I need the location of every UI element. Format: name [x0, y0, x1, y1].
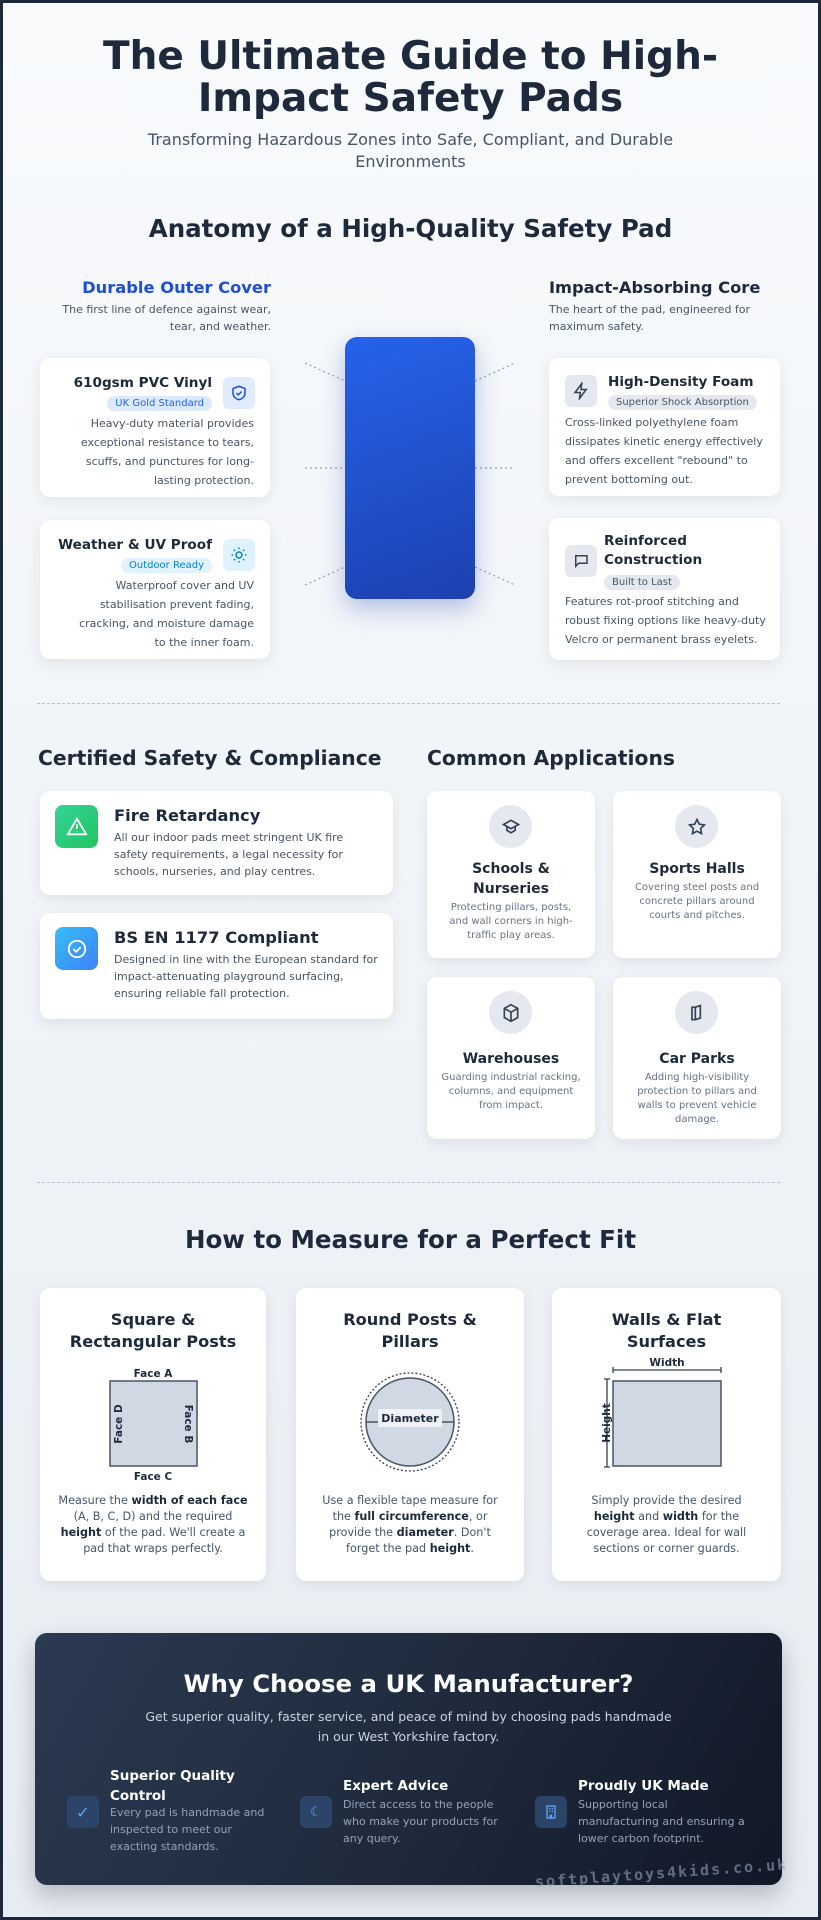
card: warehouses: Warehouses: [463, 1051, 559, 1067]
heading: certified safety: Certified Safety & Compliance: [38, 746, 382, 770]
card: fire retardancy: [40, 791, 393, 895]
card: BS EN 1177: [40, 913, 393, 1019]
card: reinforced construction: [549, 518, 780, 660]
header: durable outer cover: Durable Outer Cover: [82, 278, 271, 297]
card: fire retardancy: All our indoor pads meet stringent UK fire safety requirements, a legal necessity for schools, nurseries, and play centres.: [114, 831, 343, 878]
icon: check circle: [55, 927, 98, 970]
feature: expert advice: ☾: [310, 1804, 322, 1820]
subtitle: Environments: [355, 152, 466, 171]
card: weather & UV proof: [40, 520, 270, 659]
diagram: circle: Diameter: [381, 1412, 439, 1425]
card: weather & UV proof: Waterproof cover and UV stabilisation prevent fading, cracking, and moisture damage to the inner foam.: [79, 579, 254, 649]
header: durable outer cover: The first line of defence against wear,: [62, 303, 271, 316]
card: car parks: Adding high-visibility protection to pillars and walls to prevent vehicle damage.: [637, 1072, 757, 1125]
card: round posts: Round Posts &: [343, 1310, 477, 1329]
card: square posts: [40, 1288, 266, 1581]
card: reinforced construction: Features rot-proof stitching and robust fixing options like heavy-duty Velcro or permanent brass eyelets.: [565, 595, 766, 646]
card: round posts: Pillars: [381, 1332, 439, 1351]
icon: stitch: [565, 545, 597, 577]
connector lines: [304, 362, 514, 586]
card: reinforced construction: Built to Last: [612, 577, 672, 588]
card: walls: [552, 1288, 781, 1581]
card: schools & nurseries: Schools &: [472, 861, 550, 877]
card: schools & nurseries: Nurseries: [473, 881, 549, 897]
card: warehouses: Guarding industrial racking, columns, and equipment from impact.: [441, 1072, 581, 1111]
diagram: circle: [360, 1372, 460, 1472]
feature: UK made: Proudly UK Made: [578, 1778, 709, 1794]
card: weather & UV proof: Outdoor Ready: [129, 560, 204, 571]
card: 610gsm PVC vinyl: Heavy-duty material provides exceptional resistance to tears, scuffs, and punctures for long-lasting protection.: [81, 417, 254, 487]
card: walls: Walls & Flat: [612, 1310, 721, 1329]
feature: expert advice: Direct access to the people who make your products for any query.: [343, 1798, 498, 1845]
title: [103, 34, 718, 121]
card: schools & nurseries: Protecting pillars, posts, and wall corners in high-traffic play areas.: [449, 902, 573, 941]
title: The Ultimate Guide to High-: [103, 34, 718, 79]
feature: quality control: Every pad is handmade and inspected to meet our exacting standards.: [110, 1806, 264, 1853]
watermark: softplaytoys4kids.co.uk: [534, 1855, 789, 1891]
heading: common applications: Common Applications: [427, 746, 675, 770]
card: 610gsm PVC vinyl: UK Gold Standard: [115, 398, 204, 409]
header: impact-absorbing core: Impact-Absorbing Core: [549, 278, 760, 297]
subtitle: Transforming Hazardous Zones into Safe, Compliant, and Durable: [148, 130, 673, 149]
subtitle: why choose: Get superior quality, faster service, and peace of mind by choosing pads handmade: [145, 1709, 672, 1724]
feature: quality control: Control: [110, 1788, 166, 1804]
feature: quality control: ✓: [76, 1802, 90, 1822]
card: BS EN 1177: Designed in line with the European standard for impact-attenuating playground surfacing, ensuring reliable fall protection.: [114, 953, 378, 1000]
card: BS EN 1177: BS EN 1177 Compliant: [114, 928, 318, 947]
diagram: square post: Face C: [134, 1471, 172, 1483]
card: round posts: Use a flexible tape measure for the full circumference, or provide the diameter. Don't forget the pad height.: [322, 1494, 498, 1555]
diagram: square post: Face B: [182, 1405, 194, 1443]
diagram: square post: Face D: [113, 1404, 125, 1444]
heading: how to measure: How to Measure for a Perfect Fit: [185, 1225, 636, 1254]
feature: quality control: Superior Quality: [110, 1768, 235, 1784]
card: fire retardancy: Fire Retardancy: [114, 806, 260, 825]
header: impact-absorbing core: [548, 278, 760, 333]
feature: expert advice: [300, 1778, 498, 1845]
card: 610gsm PVC vinyl: 610gsm PVC Vinyl: [74, 375, 212, 391]
card: square posts: Rectangular Posts: [70, 1332, 236, 1351]
header: durable outer cover: [62, 278, 271, 333]
subtitle: why choose: [145, 1709, 672, 1744]
icon: pillar: [675, 991, 718, 1034]
card: reinforced construction: Reinforced: [604, 533, 687, 549]
subtitle: [148, 130, 673, 171]
icon: sun: [223, 539, 255, 571]
card: car parks: [613, 977, 781, 1139]
card: high-density foam: [549, 358, 780, 496]
diagram: square post: [109, 1368, 198, 1483]
header: impact-absorbing core: The heart of the pad, engineered for: [549, 303, 750, 316]
title: Impact Safety Pads: [198, 76, 623, 121]
icon: warning: [55, 805, 98, 848]
icon: shield: [223, 377, 255, 409]
feature: UK made: Supporting local manufacturing and ensuring a lower carbon footprint.: [578, 1798, 745, 1845]
icon: star: [675, 805, 718, 848]
card: warehouses: [427, 977, 595, 1139]
icon: bolt: [565, 375, 597, 407]
subtitle: why choose: in our West Yorkshire factory.: [318, 1729, 499, 1744]
header: impact-absorbing core: maximum safety.: [549, 320, 644, 333]
card: round posts: [296, 1288, 524, 1581]
card: sports halls: [613, 791, 781, 958]
heading: why choose: Why Choose a UK Manufacturer?: [184, 1669, 633, 1698]
card: square posts: Square &: [111, 1310, 195, 1329]
feature: expert advice: Expert Advice: [343, 1778, 448, 1794]
diagram: wall: Height: [601, 1403, 613, 1443]
header: durable outer cover: tear, and weather.: [170, 320, 271, 333]
feature: quality control: [67, 1768, 264, 1853]
card: sports halls: Sports Halls: [649, 861, 745, 877]
card: sports halls: Covering steel posts and concrete pillars around courts and pitches.: [635, 882, 759, 921]
card: 610gsm PVC vinyl: [40, 358, 270, 497]
panel: why choose a UK manufacturer: [35, 1633, 782, 1885]
card: high-density foam: High-Density Foam: [608, 374, 754, 390]
card: schools & nurseries: [427, 791, 595, 958]
card: reinforced construction: Construction: [604, 552, 702, 568]
card: square posts: Measure the width of each face (A, B, C, D) and the required height of the pad. We'll create a pad that wraps perfectly.: [58, 1494, 248, 1555]
heading: anatomy: Anatomy of a High-Quality Safety Pad: [149, 214, 672, 243]
card: high-density foam: Cross-linked polyethylene foam dissipates kinetic energy effectively and offers excellent "rebound" to prevent bottoming out.: [565, 416, 763, 486]
card: car parks: Car Parks: [659, 1051, 735, 1067]
card: walls: Simply provide the desired height and width for the coverage area. Ideal for wall sections or corner guards.: [587, 1494, 746, 1555]
diagram: square post: Face A: [134, 1368, 173, 1380]
card: walls: Surfaces: [627, 1332, 706, 1351]
pad illustration: [345, 337, 475, 599]
icon: graduation cap: [489, 805, 532, 848]
icon: box: [489, 991, 532, 1034]
feature: UK made: [535, 1778, 745, 1845]
card: high-density foam: Superior Shock Absorption: [616, 397, 749, 408]
card: weather & UV proof: Weather & UV Proof: [58, 537, 212, 553]
diagram: wall: [601, 1358, 722, 1468]
